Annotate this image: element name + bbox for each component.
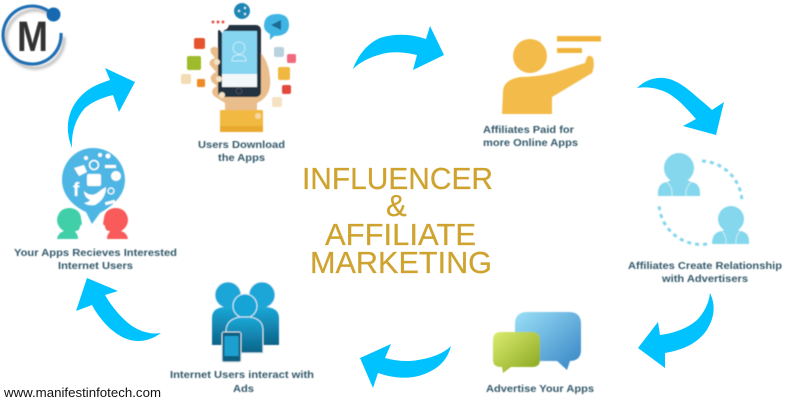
label: your apps receives (14, 247, 177, 272)
title: & (386, 188, 407, 223)
label: affiliates create relationship: Affiliates Create Relationship (628, 260, 782, 272)
icon: user group with tablet (212, 282, 279, 362)
label: internet users interact (170, 369, 314, 395)
icon: social bubble with heads (57, 148, 128, 239)
label: affiliates create relationship (628, 260, 782, 285)
label: your apps receives: Your Apps Recieves Interested (14, 247, 177, 259)
icon: phone with apps (181, 3, 296, 132)
arrow: advertise to internet users (360, 344, 451, 388)
title: INFLUENCER (302, 161, 493, 196)
label: internet users interact: Internet Users interact with (170, 369, 314, 381)
icon: linked people (658, 153, 749, 244)
label: users download: Users Download (198, 139, 285, 151)
website url: www.manifestinfotech.com (3, 385, 161, 400)
logo: M (17, 13, 48, 61)
label: affiliates paid: Affiliates Paid for (483, 124, 574, 136)
icon: person pointing (502, 36, 601, 114)
label: users download (198, 139, 285, 164)
label: users download: the Apps (218, 152, 265, 164)
title (302, 161, 493, 280)
title: MARKETING (310, 245, 492, 280)
arrow: relationship to advertise (638, 293, 714, 368)
arrow: internet users to apps (76, 278, 161, 341)
label: affiliates paid: more Online Apps (483, 137, 578, 149)
logo (3, 6, 64, 68)
label: internet users interact: Ads (233, 383, 254, 395)
icon: speech bubbles (493, 312, 581, 373)
arrow: apps users to download (68, 68, 135, 148)
icon: social bubble with heads: f (73, 180, 80, 201)
arrow: paid to relationship (637, 78, 724, 135)
label: affiliates create relationship: with Advertisers (661, 273, 748, 285)
label: your apps receives: Internet Users (58, 260, 133, 272)
label: affiliates paid (483, 124, 578, 149)
title: AFFILIATE (325, 217, 476, 252)
label: advertise your apps: Advertise Your Apps (486, 383, 594, 395)
arrow: download to paid (353, 26, 444, 70)
